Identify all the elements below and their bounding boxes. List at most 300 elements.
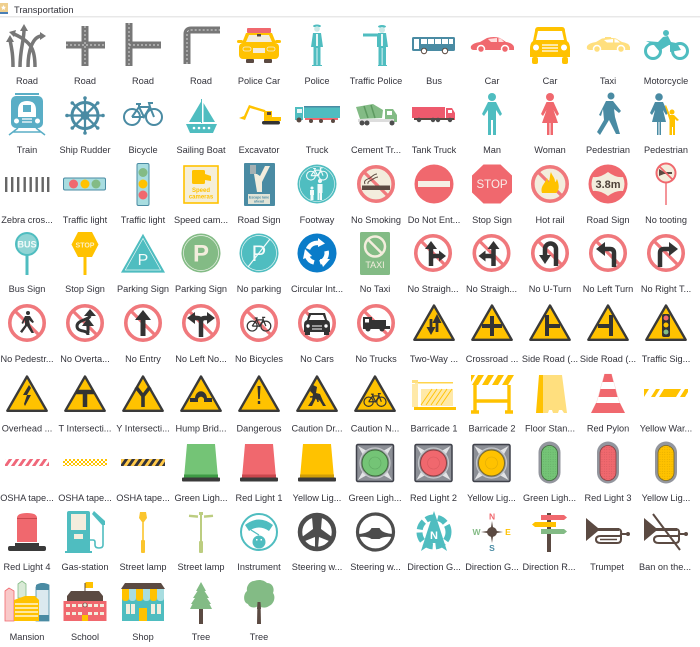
item: Sailing Boat: [176, 99, 226, 155]
icon: [646, 306, 686, 340]
label: No Pedestr...: [0, 354, 54, 364]
label: Trumpet: [590, 562, 624, 572]
icon: [538, 442, 560, 484]
icon: [184, 306, 218, 340]
item: Barricade 2: [469, 375, 515, 434]
item: Parking Sign triangle: [117, 235, 169, 294]
item: Street lamp yellow: [120, 512, 166, 572]
label: Street lamp: [178, 562, 224, 572]
item: Car red: [471, 37, 514, 86]
icon: [298, 164, 336, 204]
icon: [295, 106, 340, 123]
item: Road junction: [6, 24, 46, 86]
item: Yellow Light 1: [293, 444, 341, 503]
icon: [533, 167, 567, 201]
icon: [137, 164, 149, 206]
icon: [359, 167, 393, 201]
icon: Speed: [192, 188, 210, 194]
label: Sailing Boat: [176, 145, 226, 155]
item: Woman: [534, 93, 566, 155]
item: Train: [9, 93, 45, 155]
icon: [587, 37, 630, 52]
icon: [472, 306, 512, 340]
label: Barricade 2: [469, 424, 515, 434]
icon: stencil star: [0, 3, 8, 14]
icon: [186, 99, 217, 133]
icon: [412, 107, 455, 122]
label: Car: [543, 76, 557, 86]
icon: [656, 164, 676, 205]
icon: [239, 105, 281, 124]
label: Road: [74, 76, 96, 86]
label: No Straigh...: [407, 284, 459, 294]
label: Pedestrian: [586, 145, 630, 155]
label: Yellow Lig...: [467, 493, 516, 503]
icon: ahead: [254, 200, 264, 204]
icon: [650, 93, 679, 135]
item: OSHA tape red: [0, 459, 54, 503]
item: Green Light 1: [174, 444, 228, 503]
icon: N: [489, 512, 495, 522]
label: No U-Turn: [529, 284, 571, 294]
label: Yellow War...: [640, 424, 692, 434]
icon: [591, 236, 625, 270]
label: Bus Sign: [9, 284, 45, 294]
item: OSHA tape yellow: [58, 459, 112, 503]
label: Red Light 2: [410, 493, 457, 503]
label: Green Ligh...: [348, 493, 402, 503]
icon: Escape lane: [249, 196, 269, 200]
label: Overhead ...: [2, 424, 52, 434]
item: Barricade 1: [411, 380, 457, 434]
item: Excavator: [239, 105, 281, 155]
icon: [655, 442, 677, 484]
label: Traffic light: [121, 215, 166, 225]
item: Side Road right: [522, 306, 578, 364]
icon: [123, 376, 163, 411]
item: Traffic light horizontal: [63, 178, 108, 225]
label: Car: [485, 76, 499, 86]
label: Woman: [534, 145, 566, 155]
label: No Right T...: [641, 284, 691, 294]
item: No tooting: [645, 164, 687, 225]
icon: [311, 24, 323, 66]
label: Stop Sign: [65, 284, 105, 294]
label: Shop: [132, 632, 154, 642]
label: No Bicycles: [235, 354, 283, 364]
label: Taxi: [600, 76, 616, 86]
item: Road T: [129, 23, 161, 86]
icon: P: [138, 252, 148, 269]
icon: [356, 444, 394, 482]
item: No parking: [237, 234, 281, 294]
item: Floor Stand: [525, 375, 575, 434]
icon: [68, 306, 102, 340]
item: Direction Guide compass: [465, 512, 519, 572]
icon: [474, 236, 509, 270]
label: Red Pylon: [587, 424, 629, 434]
icon: [473, 444, 510, 482]
icon: [63, 459, 107, 466]
icon: [597, 92, 621, 135]
label: School: [71, 632, 99, 642]
label: Dangerous: [237, 424, 282, 434]
item: Yellow Light 3: [642, 442, 690, 503]
item: Speed camera: [174, 166, 228, 225]
label: Direction G...: [407, 562, 461, 572]
icon: E: [505, 527, 511, 537]
icon: [356, 104, 397, 126]
label: Red Light 3: [584, 493, 632, 503]
label: Steering w...: [292, 562, 342, 572]
item: No Cars: [300, 306, 334, 364]
item: Red Light 3: [584, 442, 632, 503]
icon: [139, 512, 147, 553]
label: Gas-station: [62, 562, 108, 572]
label: Caution Dr...: [291, 424, 343, 434]
icon: BUS: [17, 240, 37, 250]
item: Circular Intersection: [291, 234, 343, 294]
item: Direction Road signpost: [522, 513, 576, 572]
label: No Trucks: [355, 354, 397, 364]
item: Yellow Warning: [640, 389, 692, 434]
icon: TAXI: [365, 260, 385, 270]
item: Traffic Police: [350, 25, 402, 86]
label: Crossroad ...: [466, 354, 518, 364]
label: No tooting: [645, 215, 687, 225]
label: Man: [483, 145, 501, 155]
label: Road: [132, 76, 154, 86]
label: Hump Brid...: [175, 424, 227, 434]
item: No Taxi: [360, 232, 390, 294]
label: Speed cam...: [174, 215, 228, 225]
icon: W: [472, 527, 481, 537]
label: Parking Sign: [175, 284, 227, 294]
label: Traffic Police: [350, 76, 402, 86]
label: Road Sign: [238, 215, 280, 225]
label: Bicycle: [128, 145, 158, 155]
icon: [8, 513, 46, 551]
label: Instrument: [237, 562, 281, 572]
item: Tree round: [244, 580, 274, 642]
label: No parking: [237, 284, 281, 294]
label: Footway: [300, 215, 335, 225]
icon: [121, 583, 165, 621]
icon: [6, 24, 46, 67]
icon: [471, 37, 514, 52]
icon: [591, 374, 625, 413]
label: Parking Sign: [117, 284, 169, 294]
item: Traffic Signal warning: [642, 306, 690, 364]
icon: [471, 375, 514, 412]
label: Direction R...: [522, 562, 576, 572]
icon: [414, 164, 454, 204]
item: Steering wheel 1: [292, 515, 342, 572]
icon: [297, 376, 337, 411]
icon: [300, 306, 334, 340]
icon: [5, 459, 49, 466]
icon: [126, 306, 160, 340]
icon: [644, 514, 688, 550]
label: No Left Turn: [583, 284, 633, 294]
label: Pedestrian: [644, 145, 688, 155]
label: Tank Truck: [412, 145, 457, 155]
header bar: [0, 3, 700, 18]
icon: [649, 236, 683, 270]
label: Zebra cros...: [1, 215, 53, 225]
icon: [530, 27, 570, 64]
label: OSHA tape...: [0, 493, 54, 503]
icon: [7, 376, 47, 411]
label: Y Intersecti...: [116, 424, 170, 434]
icon: [64, 582, 106, 621]
title: Transportation: [14, 5, 74, 15]
item: Gas-station: [62, 511, 108, 572]
item: Stop Sign post: [65, 232, 105, 294]
label: Ship Rudder: [59, 145, 111, 155]
icon: [190, 582, 212, 624]
label: OSHA tape...: [58, 493, 112, 503]
label: Steering w...: [350, 562, 401, 572]
icon: [182, 444, 220, 482]
item: Bicycle: [124, 103, 162, 155]
label: Caution N...: [351, 424, 399, 434]
icon: [298, 444, 336, 482]
item: Red Light 4: [4, 513, 50, 572]
item: Car yellow: [530, 27, 570, 86]
icon: [300, 515, 334, 549]
icon: [644, 389, 688, 397]
item: Motorcycle: [644, 30, 688, 86]
icon: [121, 459, 165, 466]
item: Do Not Enter: [408, 164, 460, 225]
icon: [541, 93, 559, 135]
icon: [646, 30, 688, 58]
item: No Entry: [125, 306, 161, 364]
icon: [189, 512, 213, 553]
icon: [241, 514, 277, 550]
item: OSHA tape black: [116, 459, 170, 503]
icon: P: [193, 240, 209, 268]
label: Mansion: [10, 632, 44, 642]
icon: S: [489, 543, 495, 553]
item: School: [64, 582, 106, 642]
label: Tree: [192, 632, 210, 642]
icon: cameras: [189, 194, 214, 200]
item: No Straight or Right: [407, 236, 459, 294]
item: Tree pine: [190, 582, 212, 642]
item: No Bicycles: [235, 306, 283, 364]
item: No U-Turn: [529, 236, 571, 294]
item: Overhead wires: [2, 376, 52, 434]
item: Direction Guide N: [407, 511, 461, 572]
label: Ban on the...: [639, 562, 691, 572]
item: No Pedestrian: [0, 306, 54, 364]
label: Floor Stan...: [525, 424, 575, 434]
item: Trumpet: [586, 518, 630, 572]
item: Police: [304, 24, 330, 86]
item: Road Sign 3.8m: [587, 164, 629, 225]
label: No Left No...: [175, 354, 227, 364]
icon: 3.8m: [595, 179, 621, 191]
label: No Cars: [300, 354, 334, 364]
item: Red Pylon: [587, 374, 629, 434]
icon: [237, 28, 281, 63]
icon: [414, 306, 454, 340]
item: Zebra crossing: [1, 177, 53, 225]
icon: [415, 444, 452, 482]
label: Police: [304, 76, 330, 86]
item: Instrument: [237, 514, 281, 572]
label: Do Not Ent...: [408, 215, 460, 225]
item: No Straight or Left: [466, 236, 517, 294]
item: Road corner: [187, 30, 220, 86]
label: Road: [190, 76, 212, 86]
label: Motorcycle: [644, 76, 688, 86]
item: No Smoking: [351, 167, 401, 225]
label: Traffic light: [63, 215, 108, 225]
icon: [5, 581, 49, 621]
item: Pedestrian walking: [586, 92, 630, 155]
item: Traffic light vertical: [121, 164, 166, 225]
item: Police Car: [237, 28, 281, 86]
icon: [412, 37, 455, 54]
label: Green Ligh...: [523, 493, 576, 503]
item: T Intersection: [59, 376, 111, 434]
label: Green Ligh...: [174, 493, 228, 503]
item: Hot rail: [533, 167, 567, 225]
item: Green Light 3: [523, 442, 576, 503]
icon: [65, 96, 105, 135]
label: Traffic Sig...: [642, 354, 690, 364]
icon: STOP: [476, 179, 508, 191]
icon: [588, 306, 628, 340]
item: Two-Way: [410, 306, 458, 364]
icon: [66, 26, 105, 66]
icon: [244, 163, 275, 206]
item: Man: [482, 93, 502, 155]
label: T Intersecti...: [59, 424, 111, 434]
icon: [586, 518, 630, 543]
item: Red Light 2: [410, 444, 457, 503]
icon: [358, 514, 394, 550]
label: Two-Way ...: [410, 354, 458, 364]
label: Street lamp: [120, 562, 166, 572]
item: Crossroad: [466, 306, 518, 364]
item: Ship Rudder: [59, 96, 111, 155]
icon: [416, 236, 450, 270]
label: Stop Sign: [472, 215, 512, 225]
icon: [530, 306, 570, 340]
label: Train: [17, 145, 37, 155]
label: Truck: [306, 145, 329, 155]
icon: N: [430, 530, 438, 542]
item: No Left No Right: [175, 306, 227, 364]
icon: [472, 512, 511, 553]
label: Yellow Lig...: [293, 493, 341, 503]
label: Hot rail: [535, 215, 565, 225]
item: Hump Bridge: [175, 376, 227, 434]
label: No Smoking: [351, 215, 401, 225]
item: No Trucks: [355, 306, 397, 364]
label: No Taxi: [360, 284, 390, 294]
icon: [65, 511, 105, 553]
label: Red Light 4: [4, 562, 50, 572]
label: Police Car: [238, 76, 280, 86]
icon: [239, 376, 279, 411]
icon: [412, 380, 456, 410]
label: Road: [16, 76, 38, 86]
icon: [244, 580, 274, 624]
icon: [482, 93, 502, 135]
item: Green Light 2: [348, 444, 402, 503]
item: Caution Non-motorized: [351, 376, 399, 434]
item: Y Intersection: [116, 376, 170, 434]
label: Side Road (...: [580, 354, 636, 364]
item: Road cross: [66, 26, 105, 86]
label: No Straigh...: [466, 284, 517, 294]
icon: [65, 376, 105, 411]
icon: [359, 306, 393, 340]
icon: [533, 236, 567, 270]
item: Dangerous: [237, 376, 282, 434]
item: Ban on the horn: [639, 514, 691, 572]
icon: [597, 442, 619, 484]
label: Circular Int...: [291, 284, 343, 294]
icon: [181, 376, 221, 411]
label: OSHA tape...: [116, 493, 170, 503]
icon: [184, 166, 218, 203]
icon: [124, 103, 162, 125]
icon: [9, 93, 45, 135]
item: Stop Sign: [472, 164, 512, 225]
item: Red Light 1: [236, 444, 282, 503]
icon: [5, 177, 49, 192]
item: Bus: [412, 37, 455, 86]
label: Barricade 1: [411, 424, 457, 434]
item: No Left Turn: [583, 236, 633, 294]
item: Truck: [295, 106, 340, 155]
item: Side Road left: [580, 306, 636, 364]
item: No Right Turn: [641, 236, 691, 294]
icon: [240, 444, 278, 482]
item: Parking Sign circle: [175, 234, 227, 294]
item: Pedestrian with child: [644, 93, 688, 155]
item: Road Sign escape lane: [238, 163, 280, 225]
icon: [536, 375, 567, 413]
label: No Overta...: [60, 354, 110, 364]
item: Yellow Light 2: [467, 444, 516, 503]
icon: [10, 306, 44, 340]
item: Cement Truck: [351, 104, 401, 155]
label: Direction G...: [465, 562, 519, 572]
label: Yellow Lig...: [642, 493, 690, 503]
label: Tree: [250, 632, 268, 642]
item: Caution Drop: [291, 376, 343, 434]
label: Road Sign: [587, 215, 629, 225]
icon: [363, 25, 388, 66]
label: Red Light 1: [236, 493, 282, 503]
item: No Overtaking: [60, 306, 110, 364]
item: Steering wheel 2: [350, 514, 401, 572]
label: Cement Tr...: [351, 145, 401, 155]
icon: [242, 306, 276, 340]
icon: [298, 234, 336, 272]
label: Excavator: [239, 145, 279, 155]
icon: [64, 178, 106, 190]
label: No Entry: [125, 354, 161, 364]
icon: STOP: [76, 242, 95, 250]
